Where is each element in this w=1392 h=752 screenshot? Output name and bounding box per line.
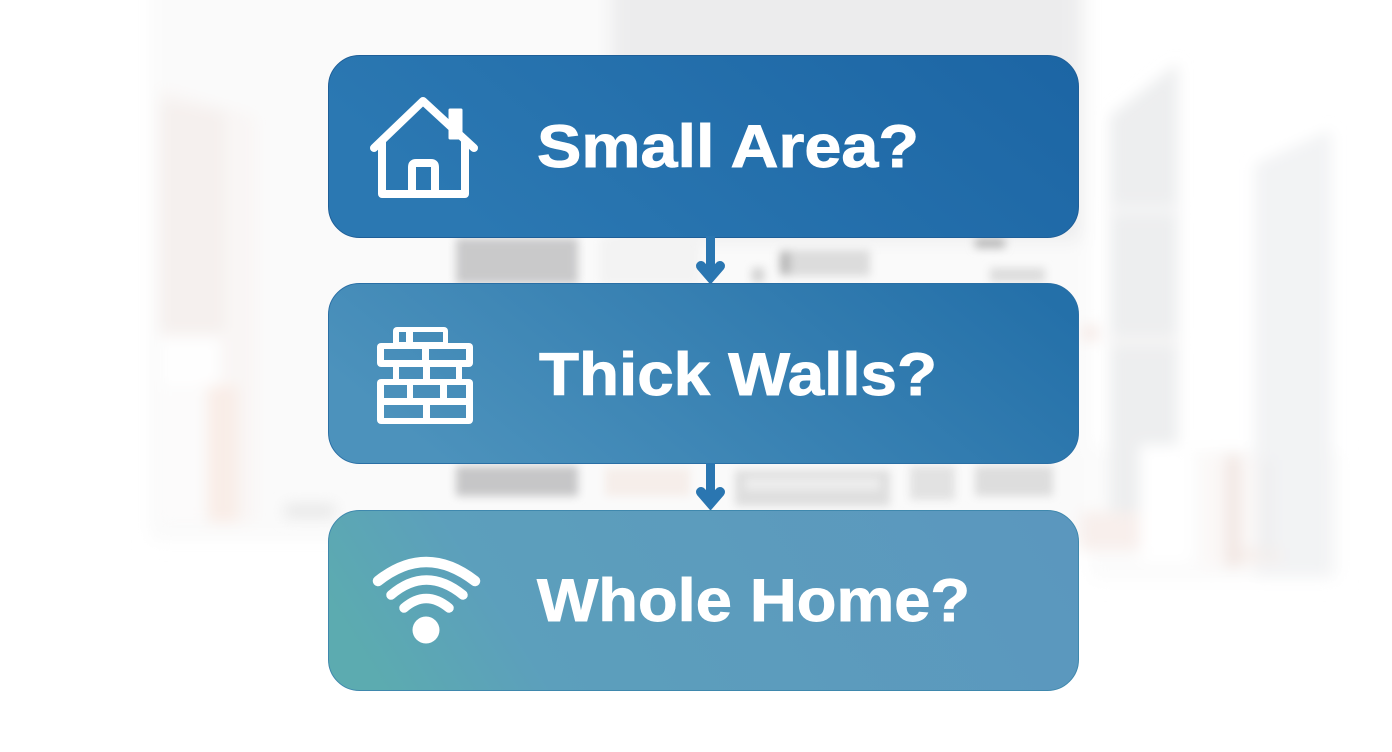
panel: whole home [328,510,1078,690]
panel: small area [328,56,1078,238]
heading: whole home: Whole Home? [537,567,970,634]
arrow: thick walls to whole home [701,463,720,503]
panel: thick walls [328,284,1078,464]
icon: house [374,101,474,194]
heading: small area: Small Area? [537,113,919,180]
heading: thick walls: Thick Walls? [539,341,937,408]
icon: brick wall [377,327,473,424]
icon: wifi [378,562,475,644]
arrow: small area to thick walls [701,236,720,277]
